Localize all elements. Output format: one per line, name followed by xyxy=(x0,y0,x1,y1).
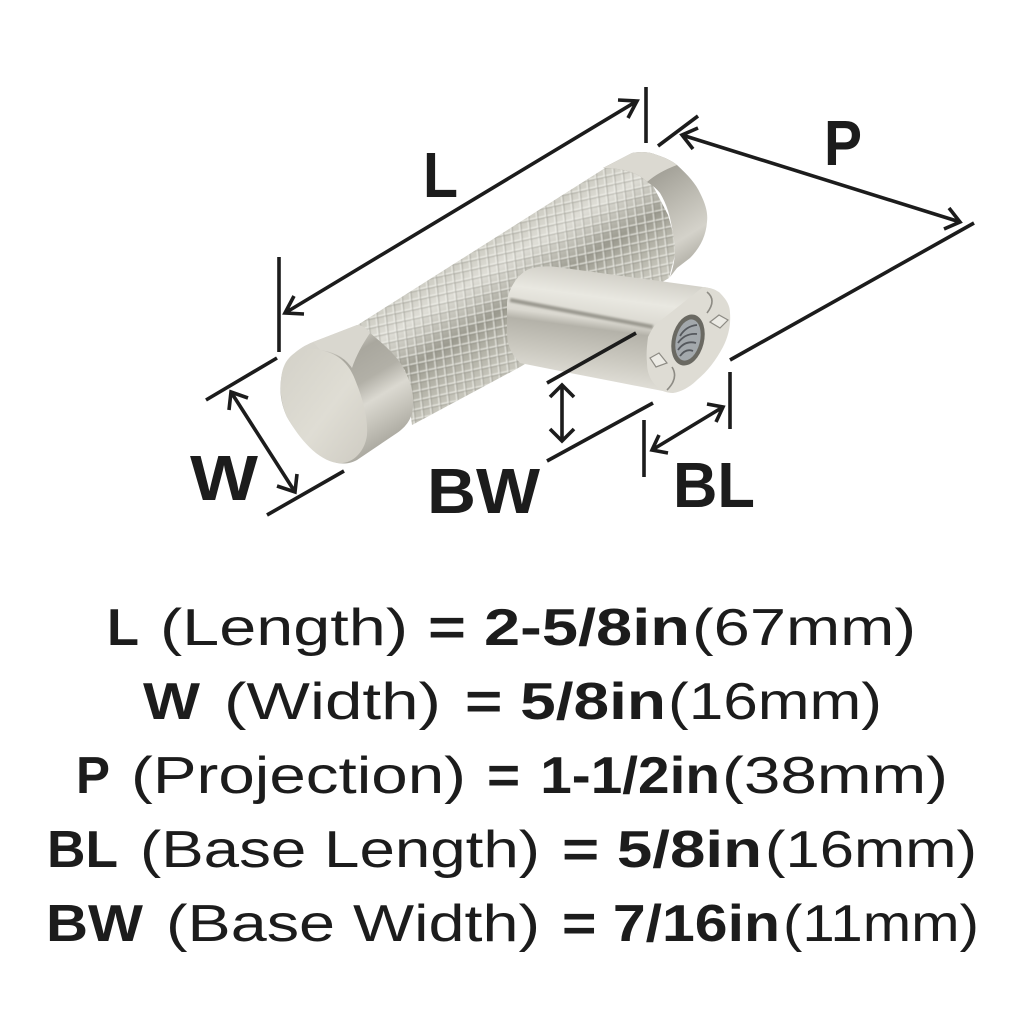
dimension lines xyxy=(206,87,974,515)
dimension label: L: L xyxy=(423,139,458,211)
spec line: base length: BL xyxy=(47,821,118,879)
spec line: width: = 5/8in xyxy=(465,673,666,731)
diagram: T-bar knob product xyxy=(280,150,730,464)
right end cap xyxy=(603,152,707,277)
spec line: length: = 2-5/8in xyxy=(428,599,690,657)
knurled bar body xyxy=(358,168,675,425)
right cap top highlight xyxy=(603,152,677,182)
stem crease line xyxy=(510,300,653,327)
face notches xyxy=(650,292,728,390)
left end cap xyxy=(280,325,413,464)
spec line: base width: (11mm) xyxy=(783,895,979,953)
W extension ticks xyxy=(206,358,344,515)
spec line: projection: (38mm) xyxy=(722,747,948,805)
spec line: width: W xyxy=(143,673,201,731)
spec line: length: (Length) xyxy=(160,599,408,657)
BL extension ticks xyxy=(644,372,730,477)
spec line: base length: = 5/8in xyxy=(562,821,762,879)
spec line: width xyxy=(143,673,882,731)
P arrow xyxy=(682,128,960,229)
spec line: length: (67mm) xyxy=(692,599,916,657)
L extension ticks xyxy=(279,87,646,352)
spec line: projection: P xyxy=(76,747,110,805)
left cap top highlight xyxy=(313,325,370,368)
spec line: projection xyxy=(76,747,948,805)
spec line: width: (16mm) xyxy=(668,673,882,731)
dimension label: BW: BW xyxy=(427,455,541,527)
spec line: length: L xyxy=(107,599,139,657)
left cap round face xyxy=(281,348,367,463)
threaded hole xyxy=(666,311,710,369)
W arrow xyxy=(229,392,297,492)
spec line: base length xyxy=(47,821,977,879)
dimension label: P: P xyxy=(824,107,862,179)
spec line: projection: = 1-1/2in xyxy=(487,747,720,805)
stem base xyxy=(507,266,730,393)
spec line: base width xyxy=(46,895,979,953)
dimension label: W: W xyxy=(190,442,259,514)
spec line: base width: (Base Width) xyxy=(166,895,540,953)
spec line: base length: (16mm) xyxy=(765,821,977,879)
spec line: base width: BW xyxy=(46,895,144,953)
P extension ticks xyxy=(658,116,974,360)
stem end face xyxy=(647,287,730,393)
BW arrow xyxy=(550,385,574,441)
BW extension ticks xyxy=(547,333,653,461)
dimension label: BL: BL xyxy=(673,449,755,521)
spec line: base width: = 7/16in xyxy=(562,895,780,953)
spec line: width: (Width) xyxy=(224,673,441,731)
BL arrow xyxy=(652,404,723,453)
L arrow xyxy=(285,100,637,314)
spec line: length xyxy=(107,599,916,657)
spec line: base length: (Base Length) xyxy=(140,821,540,879)
spec line: projection: (Projection) xyxy=(131,747,466,805)
